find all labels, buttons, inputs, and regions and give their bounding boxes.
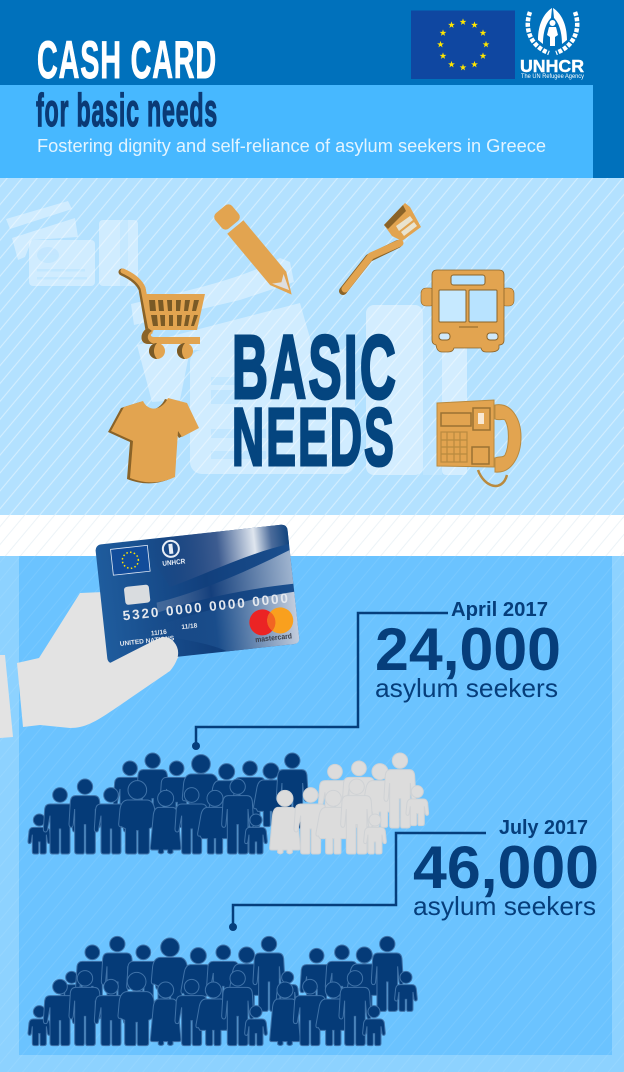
card flag — [111, 545, 150, 575]
icon: bus — [421, 270, 514, 352]
text: asylum seekers: asylum seekers — [413, 891, 596, 921]
card dates: 11/18 — [181, 622, 198, 631]
card dates — [150, 622, 198, 637]
icon: thumb — [100, 637, 178, 690]
tagline: Fostering dignity and self-reliance of asylum seekers in Greece — [37, 135, 546, 156]
heading: BASIC NEEDS — [232, 318, 398, 483]
icon: shopping cart — [122, 271, 205, 359]
text: April 2017: April 2017 — [451, 599, 548, 621]
icon: UNHCR logo — [520, 8, 584, 80]
people: April group — [28, 753, 429, 854]
mastercard logo — [248, 606, 295, 645]
credit card — [95, 524, 300, 664]
number: 24,000: 24,000 — [375, 616, 561, 683]
text: July 2017: July 2017 — [499, 817, 588, 839]
icon: telephone — [437, 400, 521, 486]
panel: basic needs background — [0, 178, 624, 515]
light outer frame — [0, 556, 624, 1072]
card UNHCR logo: UNHCR — [162, 558, 186, 568]
white strip — [0, 515, 624, 556]
card UNHCR logo — [160, 539, 186, 568]
card holder: UNITED NATIONS — [120, 635, 175, 648]
title: CASH CARD: CASH CARD — [37, 31, 217, 90]
number: 46,000: 46,000 — [413, 834, 599, 901]
icon: hand — [17, 592, 180, 728]
connector: July — [229, 833, 486, 931]
icon: pencil — [212, 202, 300, 302]
mastercard logo: mastercard — [255, 631, 293, 644]
icon: EU flag — [411, 10, 515, 79]
people: July group — [28, 936, 417, 1046]
icon: UNHCR logo: The UN Refugee Agency — [521, 74, 584, 80]
card chip — [124, 584, 151, 605]
connector: April — [192, 613, 448, 750]
header background — [0, 0, 624, 178]
text: asylum seekers: asylum seekers — [375, 673, 558, 703]
card dates: 11/16 — [151, 629, 168, 637]
card number: 5320 0000 0000 0000 — [122, 591, 289, 623]
heading: BASIC NEEDS: BASIC — [232, 318, 398, 418]
subtitle: for basic needs: for basic needs — [36, 84, 218, 136]
icon: t-shirt — [108, 398, 199, 483]
ghost cards center — [131, 258, 467, 475]
panel: statistics — [19, 556, 612, 1055]
ghost cards top left — [6, 201, 138, 286]
stripes overlay — [0, 178, 624, 515]
icon: UNHCR logo: UNHCR — [520, 56, 584, 76]
icon: sleeve — [0, 655, 13, 738]
icon: toothbrush — [343, 203, 421, 291]
light blue title band — [0, 85, 593, 178]
heading: BASIC NEEDS: NEEDS — [232, 392, 396, 483]
